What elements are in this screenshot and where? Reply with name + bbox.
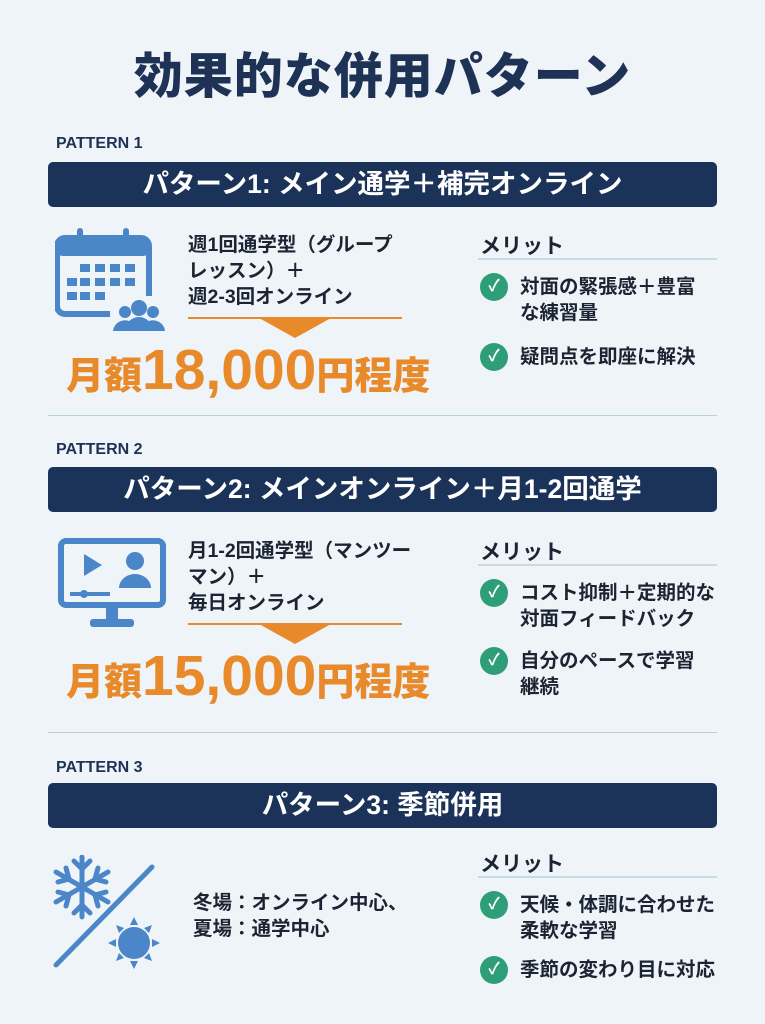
header bar: pattern 2 (48, 467, 717, 512)
arrow: orange down (188, 623, 402, 644)
merits: pattern 1: ✓ (488, 348, 500, 365)
merits: pattern 3: 季節の変わり目に対応 (520, 959, 715, 981)
merits: pattern 2: コスト抑制＋定期的な (520, 582, 715, 604)
text: pattern 3 description: 夏場：通学中心 (193, 918, 330, 940)
merits: pattern 3: ✓ (488, 896, 500, 913)
label: pattern 3: PATTERN 3 (56, 759, 143, 776)
text: pattern 1 description: レッスン）＋ (188, 260, 305, 282)
text: pattern 1 description: 週1回通学型（グループ (188, 234, 393, 256)
merits: pattern 2: 自分のペースで学習 (520, 650, 695, 672)
merits: pattern 2: ✓ (488, 584, 500, 601)
merits: pattern 1: 疑問点を即座に解決 (520, 346, 696, 368)
price: pattern 2: 月額15,000円程度 (66, 644, 430, 708)
text: pattern 2 description: マン）＋ (188, 566, 266, 588)
merits: pattern 3: 天候・体調に合わせた (520, 894, 715, 916)
icon: snowflake and sun (54, 855, 160, 969)
merits: pattern 1: ✓ (488, 278, 500, 295)
text: pattern 2 description: 毎日オンライン (188, 592, 325, 614)
icon: monitor with video (58, 538, 166, 627)
icon: calendar with group (55, 228, 165, 331)
merits: pattern 2: 対面フィードバック (520, 608, 695, 630)
header bar: pattern 2: パターン2: メインオンライン＋月1-2回通学 (123, 474, 642, 504)
label: pattern 1: PATTERN 1 (56, 135, 143, 152)
header bar: pattern 1 (48, 162, 717, 207)
merits: pattern 1: メリット (480, 235, 564, 258)
text: pattern 1 description: 週2-3回オンライン (188, 286, 353, 308)
merits: pattern 3: 柔軟な学習 (520, 920, 618, 942)
text: pattern 2 description: 月1-2回通学型（マンツー (188, 540, 411, 562)
text: pattern 2 description (188, 540, 411, 614)
merits: pattern 1: 対面の緊張感＋豊富 (520, 276, 696, 298)
header bar: pattern 1: パターン1: メイン通学＋補完オンライン (142, 169, 623, 199)
merits: pattern 2: 継続 (520, 676, 559, 698)
text: pattern 3 description (193, 892, 408, 940)
merits: pattern 2: メリット (480, 541, 564, 564)
merits: pattern 3: ✓ (488, 961, 500, 978)
header bar: pattern 3 (48, 783, 717, 828)
title: 効果的な併用パターン (134, 50, 631, 104)
text: pattern 1 description (188, 234, 393, 308)
merits: pattern 1: な練習量 (520, 302, 598, 324)
merits: pattern 2 (478, 541, 717, 698)
merits: pattern 2: ✓ (488, 652, 500, 669)
label: pattern 2: PATTERN 2 (56, 441, 143, 458)
text: pattern 3 description: 冬場：オンライン中心、 (193, 892, 408, 914)
price: pattern 1: 月額18,000円程度 (66, 338, 430, 402)
merits: pattern 3 (478, 853, 717, 984)
merits: pattern 1 (478, 235, 717, 371)
merits: pattern 3: メリット (480, 853, 564, 876)
header bar: pattern 3: パターン3: 季節併用 (262, 790, 503, 820)
arrow: orange down (188, 317, 402, 338)
